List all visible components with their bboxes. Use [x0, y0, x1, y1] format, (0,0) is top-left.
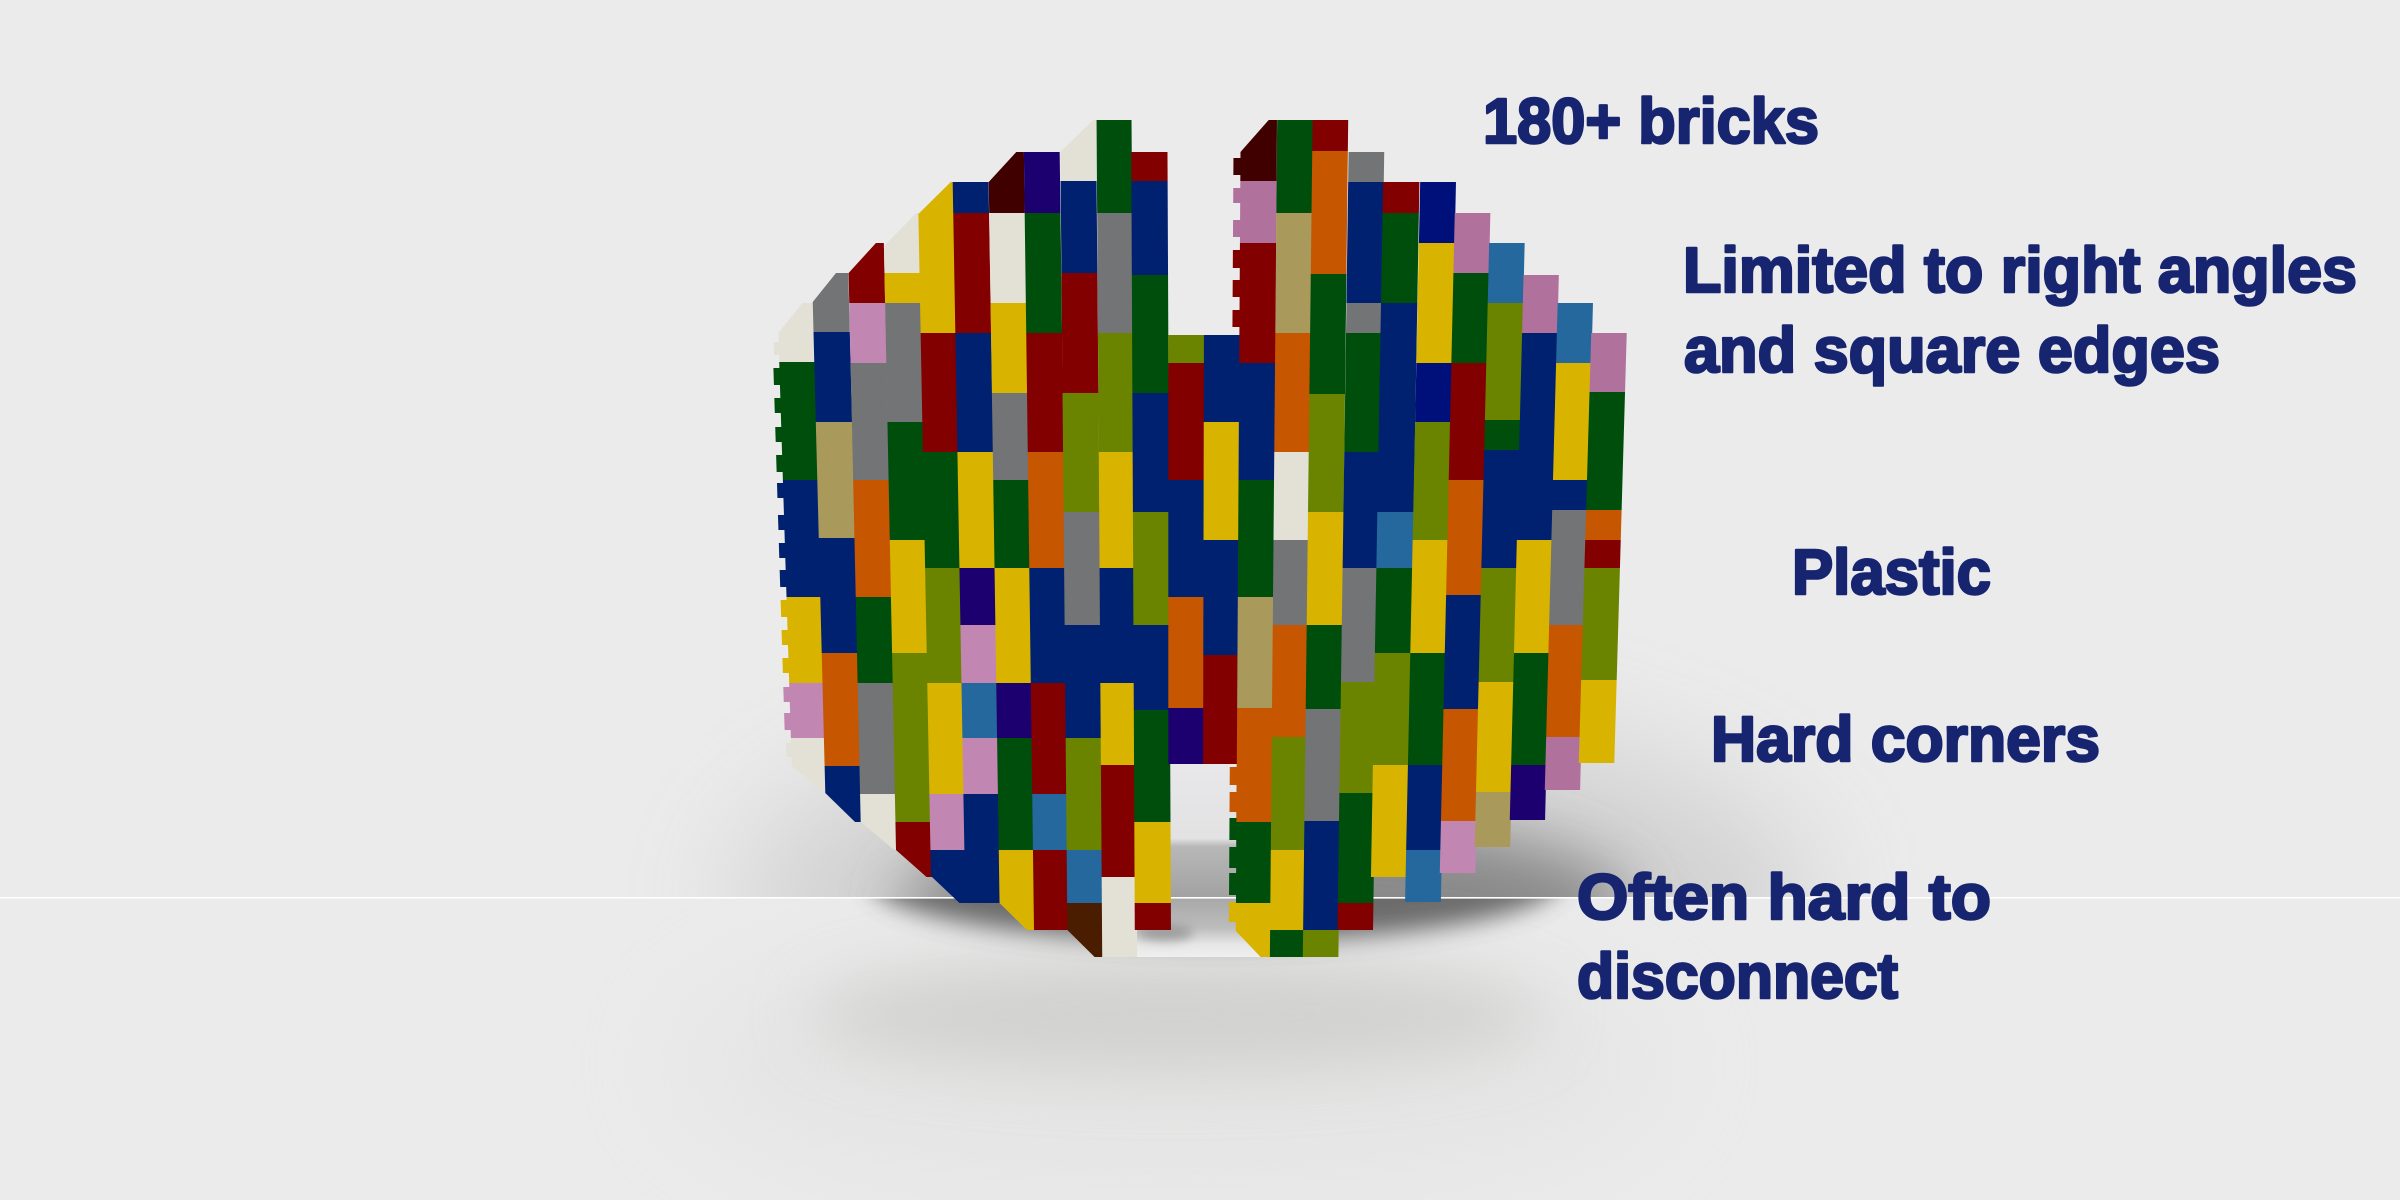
column 22 [1545, 303, 1593, 790]
left half of brick brain [771, 120, 1204, 957]
right half of brick brain [1203, 120, 1627, 957]
column 9 [1097, 120, 1137, 957]
label: 180+ bricks: 180+ bricks [1483, 85, 1819, 157]
column 1 [812, 273, 862, 822]
label: limited to right angles and square edges [1683, 234, 2357, 386]
horizon line [0, 897, 2400, 899]
column 3 [883, 213, 932, 877]
label: often hard to disconnect: disconnect [1577, 940, 1898, 1012]
column 7 [1024, 152, 1070, 930]
column 12 [1203, 335, 1240, 764]
column 5 [953, 182, 1001, 903]
column 19 [1440, 213, 1490, 873]
column 0 [771, 303, 828, 794]
column 2 [848, 243, 897, 850]
column 8 [1060, 120, 1104, 957]
label: often hard to disconnect: Often hard to [1577, 861, 1991, 933]
column 14 [1270, 120, 1313, 957]
column 6 [988, 152, 1036, 930]
column 23 [1579, 333, 1627, 763]
column 18 [1405, 182, 1456, 902]
gap shadow [1136, 764, 1262, 957]
wall shadow [727, 726, 1823, 897]
column 17 [1371, 182, 1419, 877]
column 10 [1131, 152, 1171, 930]
label: limited to right angles and square edges: Limited to right angles [1683, 234, 2357, 306]
column 15 [1303, 120, 1348, 957]
column 16 [1337, 152, 1384, 930]
column 13 [1229, 120, 1277, 957]
floor shadows [787, 898, 1568, 1122]
label: often hard to disconnect [1577, 861, 1991, 1012]
label: limited to right angles and square edges: and square edges [1684, 314, 2220, 386]
label: plastic: Plastic [1792, 536, 1991, 608]
column 20 [1475, 243, 1525, 847]
column 11 [1168, 335, 1204, 764]
brick sculpture [771, 120, 1627, 957]
label: hard corners: Hard corners [1711, 703, 2100, 775]
column 21 [1510, 275, 1559, 820]
column 4 [918, 182, 967, 903]
